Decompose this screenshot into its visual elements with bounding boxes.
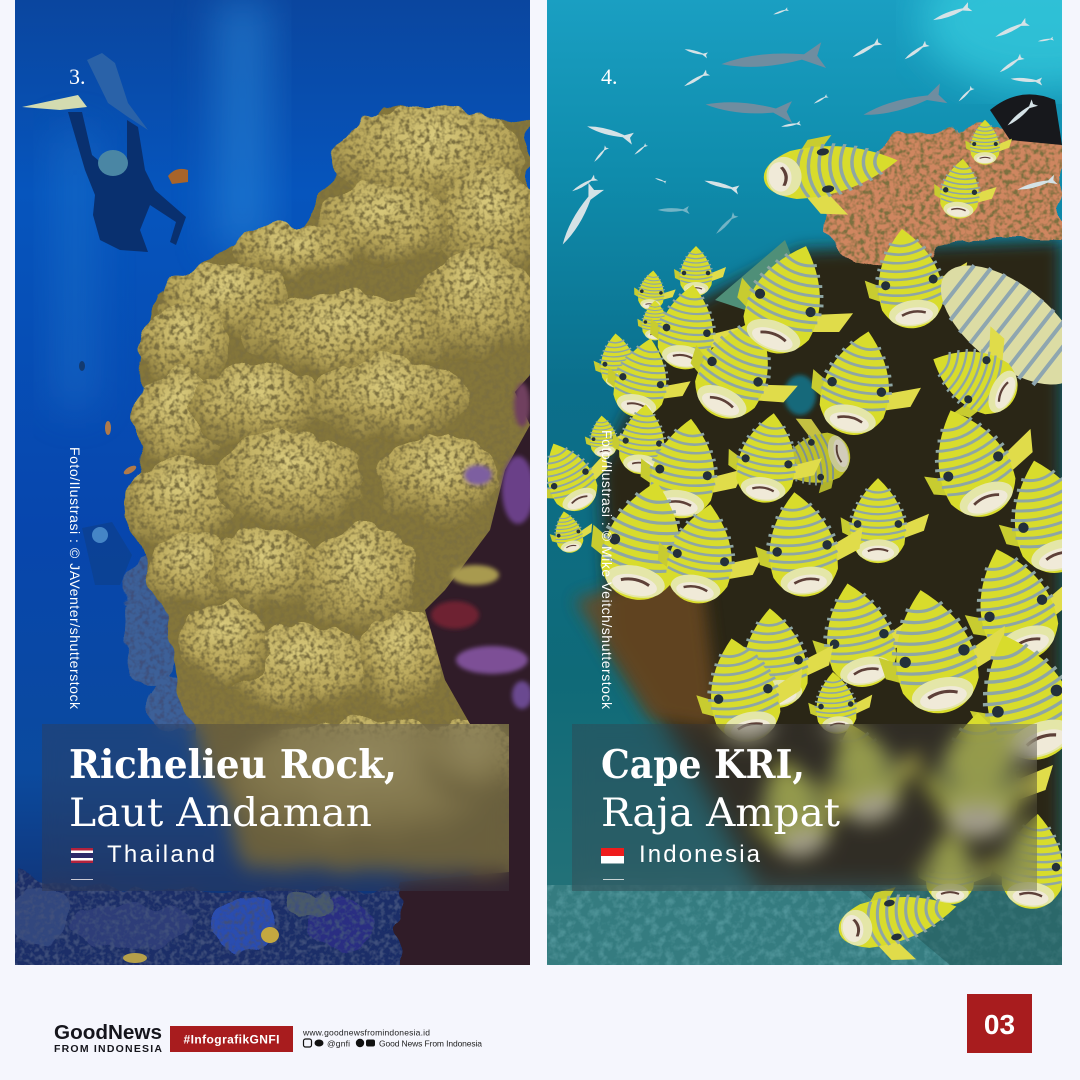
school of ribbon sweetlips: [525, 120, 1080, 974]
icon: Thailand flag: [71, 848, 93, 863]
small reef fish: [79, 361, 138, 476]
panel: photo of Richelieu Rock sea fan coral: [15, 0, 530, 965]
card: Richelieu Rock caption: [42, 724, 509, 891]
dark red reef: [380, 375, 530, 965]
footer website and social handles: [302, 1028, 482, 1048]
icon: Indonesia flag: [601, 848, 624, 864]
text: Indonesia: Indonesia: [639, 841, 761, 868]
sea fan coral: [125, 105, 540, 870]
sand floor: [547, 885, 1062, 965]
photo credit right: Foto/Ilustrasi : © Mike Veitch/shutterstock: [599, 430, 615, 710]
page number badge: 03: [984, 1009, 1015, 1040]
page number badge: [967, 994, 1032, 1053]
light rays: [55, 0, 270, 410]
dark school shadow: [600, 240, 1062, 890]
heading: Richelieu Rock: Richelieu Rock,: [69, 742, 397, 788]
small silver fish: [555, 2, 1058, 249]
text: panel number 3: 3.: [69, 64, 86, 89]
blue-grey fans: [122, 557, 205, 728]
icon: instagram: [304, 1039, 312, 1047]
footer brand logo: FROM INDONESIA: [54, 1043, 162, 1055]
hashtag badge: #InfografikGNFI: [184, 1032, 280, 1046]
icon: twitter: [314, 1040, 324, 1046]
panel: photo of Cape KRI yellow sweetlips school: [547, 0, 1062, 965]
text: Thailand: Thailand: [107, 841, 215, 868]
heading: Cape KRI: Cape KRI,: [601, 742, 805, 788]
footer website and social handles: @gnfi: [327, 1038, 350, 1048]
pink coral: [822, 125, 1062, 272]
subheading: Raja Ampat: Raja Ampat: [601, 791, 840, 836]
footer website and social handles: www.goodnewsfromindonesia.id: [302, 1028, 430, 1038]
footer website and social handles: Good News From Indonesia: [379, 1038, 482, 1048]
icon: facebook: [356, 1039, 364, 1047]
bottom reef: [5, 865, 400, 975]
text: panel number 4: 4.: [601, 64, 618, 89]
hashtag badge: [170, 1026, 293, 1052]
footer brand logo: GoodNews: [54, 1022, 162, 1044]
large pale fish at right edge: [921, 243, 1080, 407]
icon: youtube: [366, 1040, 375, 1046]
icon: scuba diver: [22, 53, 188, 252]
card: Cape KRI caption: [572, 724, 1037, 891]
icon: second diver: [82, 522, 132, 585]
photo credit left: Foto/Ilustrasi : © JAVenter/shutterstock: [67, 447, 83, 710]
footer brand logo: [54, 1022, 162, 1055]
subheading: Laut Andaman: Laut Andaman: [69, 791, 372, 836]
